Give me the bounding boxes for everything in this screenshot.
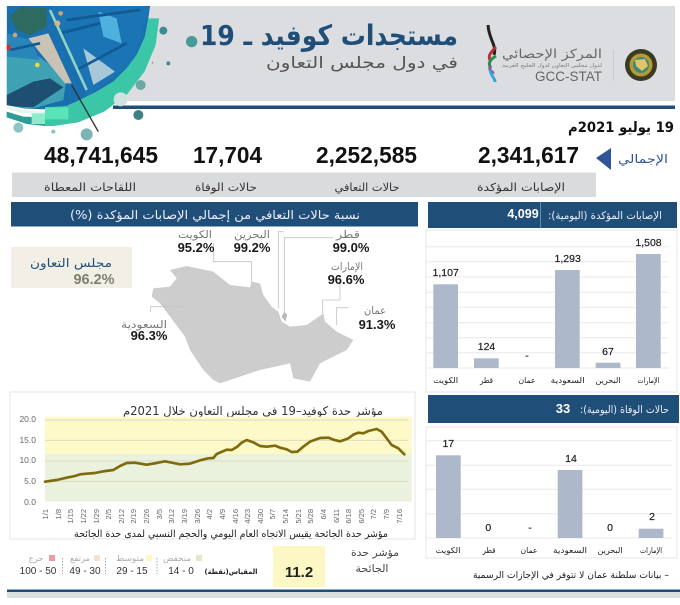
totals label band (12, 172, 596, 197)
x axis labels (41, 509, 404, 524)
x axis labels: 5/14 (281, 509, 290, 524)
GCC rate box (11, 247, 132, 288)
index heading: مؤشر حدة (351, 547, 399, 559)
daily deaths bar chart: 0 (485, 522, 491, 534)
severity scale legend: المقياس(نقطة) (204, 568, 258, 576)
daily deaths bar chart: البحرين (598, 546, 622, 555)
label: Saudi Arabia: 96.3% (131, 328, 168, 343)
scale: high: مرتفع (70, 554, 90, 563)
label: Kuwait: 95.2% (178, 240, 215, 255)
y axis labels: 0.0 (24, 497, 36, 507)
daily deaths bar chart: - (528, 522, 532, 534)
index heading: الجائحة (356, 563, 388, 575)
severity index value (273, 546, 399, 587)
stat: confirmed (477, 142, 579, 194)
stat: confirmed: الإصابات المؤكدة (477, 181, 565, 194)
plot (45, 417, 412, 502)
panel: severity index chart (10, 392, 415, 540)
total label: الإجمالي (618, 152, 668, 166)
total arrow (596, 148, 611, 170)
daily deaths bar chart: قطر (482, 546, 496, 555)
y axis labels: 10.0 (19, 455, 36, 465)
stat: vaccines (44, 142, 158, 194)
GCC rate box: 96.2% (73, 272, 115, 288)
x axis labels: 6/11 (332, 509, 341, 523)
stat: recoveries: 2,252,585 (316, 142, 417, 168)
x axis labels: 2/12 (117, 509, 126, 524)
stat: deaths: حالات الوفاة (195, 181, 257, 194)
footer band (7, 590, 680, 598)
x axis labels: 1/29 (92, 509, 101, 524)
label: Kuwait: الكويت (178, 229, 212, 241)
footnote: – بيانات سلطنة عمان لا تتوفر في الإجازات الرسمية (473, 570, 669, 581)
x axis labels: 4/2 (205, 509, 214, 519)
scale: high: 49 - 30 (69, 566, 101, 577)
y axis labels: 20.0 (19, 414, 36, 424)
x axis labels: 1/15 (66, 509, 75, 524)
label: Qatar (333, 229, 370, 255)
x axis labels: 6/25 (357, 509, 366, 524)
report date: 19 يوليو 2021م (568, 120, 674, 136)
x axis labels: 6/4 (319, 509, 328, 519)
label: Saudi Arabia (121, 319, 168, 343)
daily cases heading (428, 202, 677, 228)
scale: critical (20, 554, 57, 577)
GCC-STAT logo: لدول مجلس التعاون لدول الخليج العربية (502, 63, 603, 69)
GCC-STAT logo (488, 25, 657, 84)
stat: recoveries: حالات التعافي (334, 181, 400, 194)
scale: medium (116, 554, 152, 577)
x axis labels: 7/2 (369, 509, 378, 519)
x axis labels: 1/1 (41, 509, 50, 519)
label: UAE: الإمارات (331, 261, 363, 273)
x axis labels: 4/30 (256, 509, 265, 524)
daily deaths bar chart (426, 427, 677, 558)
chart caption: مؤشر حدة الجائحة يقيس الاتجاه العام اليومي والحجم النسبي لمدى حدة الجائحة (74, 529, 388, 540)
x axis labels: 7/16 (395, 509, 404, 524)
daily cases bar chart: عمان (518, 376, 536, 385)
daily deaths bar chart: 0 (607, 522, 613, 534)
x axis labels: 3/12 (167, 509, 176, 524)
label: Oman: 91.3% (359, 317, 396, 332)
x axis labels: 5/7 (268, 509, 277, 519)
y axis labels: 15.0 (19, 435, 36, 445)
daily cases bar chart: 124 (478, 341, 495, 353)
stat: confirmed: 2,341,617 (478, 142, 579, 168)
y axis labels (19, 414, 36, 507)
panel: daily confirmed cases (426, 202, 677, 392)
syringe needle (72, 85, 98, 132)
scale: critical: حرج (28, 554, 44, 563)
daily cases heading: الإصابات المؤكدة (اليومية): (548, 210, 662, 222)
x axis labels: 1/8 (54, 509, 63, 519)
x axis labels: 4/9 (218, 509, 227, 519)
daily cases bar chart (426, 230, 677, 392)
x axis labels: 4/16 (231, 509, 240, 524)
stat: deaths (193, 142, 262, 194)
daily cases bar chart: - (525, 350, 529, 362)
x axis labels: 2/19 (129, 509, 138, 524)
x axis labels: 3/19 (180, 509, 189, 524)
label: Qatar: قطر (335, 229, 360, 241)
label: UAE: 96.6% (328, 272, 365, 287)
daily deaths bar chart: 2 (649, 511, 655, 523)
recovery panel heading: نسبة حالات التعافي من إجمالي الإصابات المؤكدة (%) (70, 208, 360, 223)
daily deaths heading: حالات الوفاة (اليومية): (580, 404, 669, 416)
x axis labels: 2/26 (142, 509, 151, 524)
daily cases bar chart: 1,293 (555, 253, 581, 265)
GCC rate box: مجلس التعاون (30, 256, 112, 271)
x axis labels: 5/28 (306, 509, 315, 524)
label: Oman: عمان (364, 305, 386, 317)
scale: low (163, 554, 202, 577)
chart title: مؤشر حدة كوفيد–19 في مجلس التعاون خلال 2021م (123, 404, 383, 419)
daily cases heading: 4,099 (507, 207, 539, 221)
label: Bahrain: 99.2% (234, 240, 271, 255)
totals row (12, 142, 668, 197)
daily deaths heading: 33 (556, 401, 570, 416)
label: Saudi Arabia: السعودية (121, 319, 167, 331)
x axis labels: 3/5 (155, 509, 164, 519)
label: UAE (328, 261, 365, 287)
y axis labels: 5.0 (24, 476, 36, 486)
daily deaths bar chart: عمان (520, 546, 538, 555)
daily deaths bar chart: السعودية (553, 546, 587, 555)
photo (5, 6, 153, 113)
panel: recovery rate map (11, 202, 418, 383)
panel: daily deaths (426, 395, 679, 558)
map of GCC (151, 232, 353, 383)
daily cases bar chart: قطر (479, 376, 493, 385)
daily deaths heading (428, 395, 679, 423)
daily cases bar chart: 67 (602, 346, 614, 358)
GCC-STAT logo: المركز الإحصائي (502, 46, 602, 62)
daily cases bar chart: الكويت (433, 376, 458, 385)
severity scale legend (20, 554, 258, 577)
x axis labels: 1/22 (79, 509, 88, 524)
subtitle: في دول مجلس التعاون (266, 53, 458, 73)
label: Qatar: 99.0% (333, 240, 370, 255)
scale: low: 14 - 0 (168, 566, 194, 577)
x axis labels: 7/9 (382, 509, 391, 519)
scale: low: منخفض (163, 554, 191, 563)
label: Bahrain: البحرين (234, 229, 270, 241)
daily cases bar chart: السعودية (551, 376, 585, 385)
daily deaths bar chart: 14 (565, 453, 577, 465)
x axis labels: 6/18 (344, 509, 353, 524)
teal arc (45, 17, 159, 126)
stat: vaccines: اللقاحات المعطاة (44, 181, 136, 194)
scale: critical: 100 - 50 (20, 566, 57, 577)
x axis labels: 4/23 (243, 509, 252, 524)
index heading (351, 547, 399, 575)
scale: medium: 29 - 15 (116, 566, 148, 577)
stat: vaccines: 48,741,645 (44, 142, 158, 168)
label: Bahrain (234, 229, 271, 255)
title: مستجدات كوفيد ـ 19 (200, 19, 458, 52)
stat: deaths: 17,704 (193, 142, 262, 168)
label: Oman (359, 305, 396, 332)
GCC-STAT logo: GCC-STAT (535, 68, 602, 84)
daily cases bar chart: 1,107 (433, 267, 459, 279)
header rule (113, 106, 675, 109)
index value box: 11.2 (285, 564, 313, 581)
x axis labels: 5/21 (294, 509, 303, 524)
daily cases bar chart: البحرين (596, 376, 620, 385)
label: Kuwait (178, 229, 215, 255)
scale: medium: متوسط (116, 554, 144, 563)
daily deaths bar chart: 17 (442, 438, 454, 450)
recovery panel heading (11, 202, 418, 226)
daily deaths bar chart: الكويت (436, 546, 460, 555)
title (200, 19, 458, 73)
x axis labels: 2/5 (104, 509, 113, 519)
daily cases bar chart: 1,508 (635, 237, 662, 249)
daily cases bar chart: الإمارات (638, 376, 660, 386)
daily deaths bar chart: الإمارات (640, 546, 662, 556)
x axis labels: 3/26 (193, 509, 202, 524)
decorative medical image (5, 6, 197, 140)
header banner (7, 6, 675, 109)
scale: high (69, 554, 101, 577)
stat: recoveries (316, 142, 417, 194)
GCC emblem (625, 49, 657, 81)
